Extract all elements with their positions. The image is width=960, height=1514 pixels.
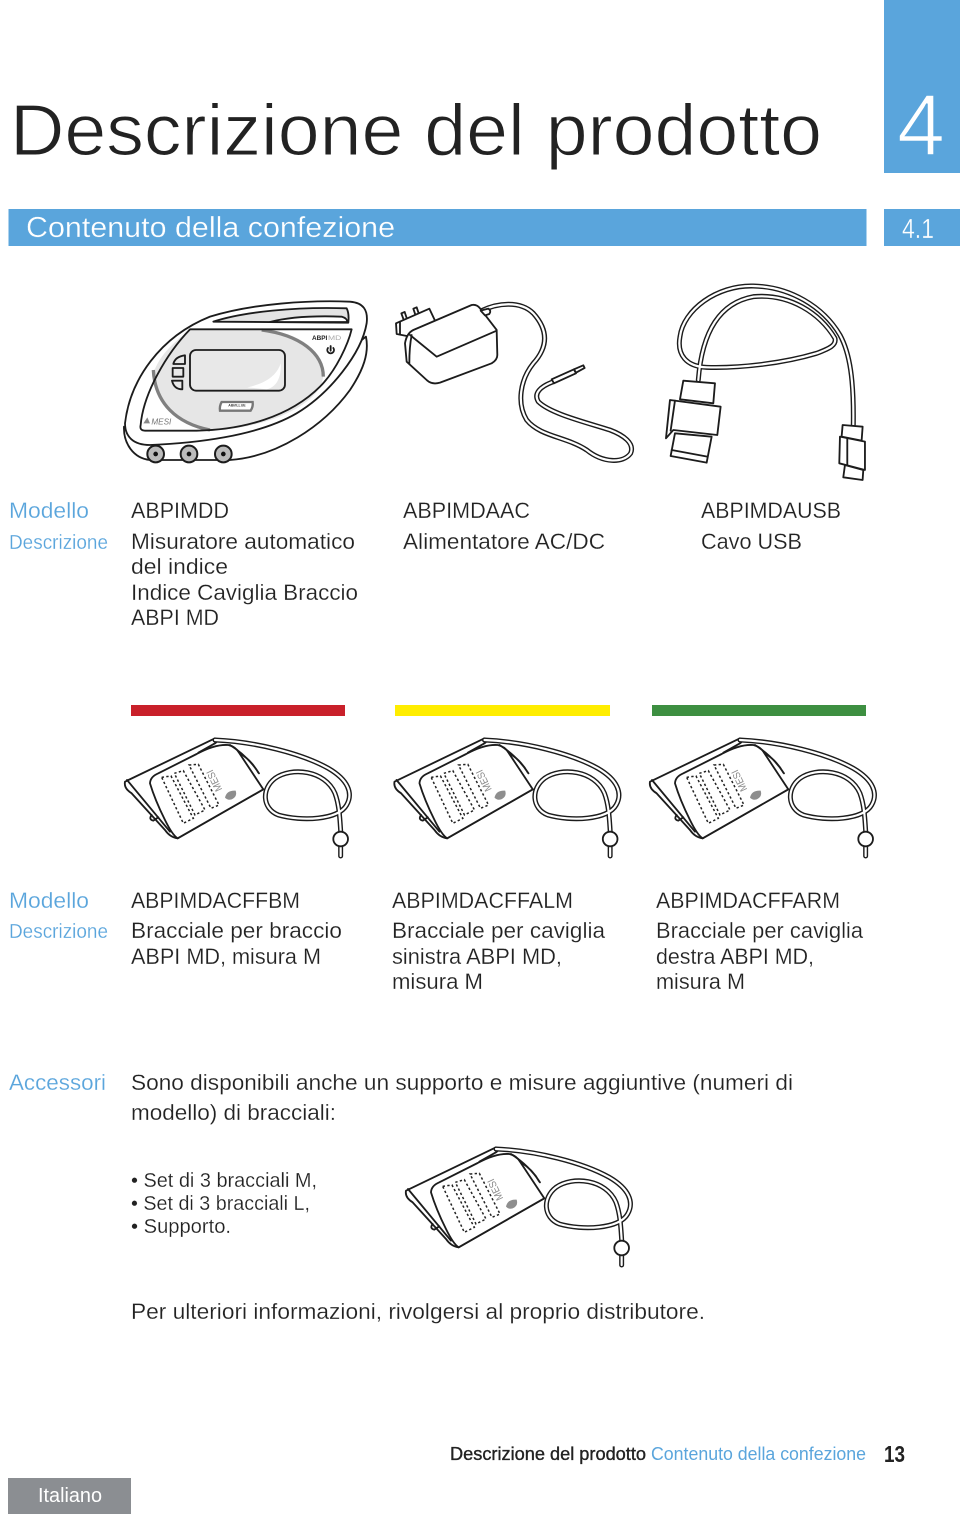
product: ABPIMDAAC: ABPIMDAAC <box>403 498 530 523</box>
chapter number tab <box>884 0 960 174</box>
product: ABPIMDACFFBM: Bracciale per braccio <box>131 918 342 943</box>
product: ABPIMDACFFALM: sinistra ABPI MD, <box>392 944 562 969</box>
illustration: right ankle cuff <box>650 738 874 856</box>
footer breadcrumb: Descrizione del prodotto <box>450 1444 646 1464</box>
product: ABPIMDACFFBM: ABPI MD, misura M <box>131 944 321 969</box>
language tab: Italiano <box>38 1485 102 1507</box>
accessories text: modello) di bracciali: <box>131 1100 336 1125</box>
language tab <box>8 1478 131 1514</box>
row 1 labels: Descrizione <box>9 532 108 554</box>
product: ABPIMDD <box>131 498 358 630</box>
closing note: Per ulteriori informazioni, rivolgersi al proprio distributore. <box>131 1299 705 1324</box>
product: ABPIMDACFFALM: misura M <box>392 969 483 994</box>
product: ABPIMDACFFARM: ABPIMDACFFARM <box>656 888 840 913</box>
colour bar: green <box>652 705 866 716</box>
accessories list: • Supporto. <box>131 1216 231 1238</box>
illustration: ABPI MD device <box>124 301 367 462</box>
accessories text <box>131 1070 793 1125</box>
accessories list: • Set di 3 bracciali L, <box>131 1193 310 1215</box>
page number: 13 <box>884 1441 905 1467</box>
accessories label: Accessori <box>9 1070 106 1095</box>
colour bar: red <box>131 705 345 716</box>
row 2 labels: Modello <box>9 888 89 913</box>
product: ABPIMDACFFARM: Bracciale per caviglia <box>656 918 864 943</box>
product: ABPIMDACFFALM: ABPIMDACFFALM <box>392 888 573 913</box>
product: ABPIMDAUSB <box>701 498 841 554</box>
product: ABPIMDACFFARM: destra ABPI MD, <box>656 944 814 969</box>
illustration: AC/DC adapter <box>396 304 632 460</box>
accessories list <box>131 1170 317 1238</box>
product: ABPIMDD: del indice <box>131 554 228 579</box>
row 2 labels <box>9 888 108 943</box>
illustration: right ankle cuff: MESI <box>730 768 750 793</box>
product: ABPIMDD: ABPI MD <box>131 605 219 630</box>
section heading bar <box>8 209 866 246</box>
product: ABPIMDACFFALM <box>392 888 606 994</box>
product: ABPIMDD: Misuratore automatico <box>131 529 355 554</box>
illustration: ABPI MD device: ABI/ILLUE <box>228 403 246 407</box>
footer breadcrumb: Contenuto della confezione <box>651 1444 866 1464</box>
product: ABPIMDD: ABPIMDD <box>131 498 229 523</box>
row 1 labels <box>9 498 108 554</box>
footer breadcrumb <box>450 1444 866 1464</box>
illustration: accessory cuff <box>406 1147 630 1265</box>
row 2 labels: Descrizione <box>9 921 108 943</box>
product: ABPIMDD: Indice Caviglia Braccio <box>131 580 358 605</box>
product: ABPIMDAUSB: ABPIMDAUSB <box>701 498 841 523</box>
row 1 labels: Modello <box>9 498 89 523</box>
illustration: left ankle cuff: MESI <box>475 768 495 793</box>
title: Descrizione del prodotto <box>10 91 822 171</box>
product: ABPIMDACFFARM: misura M <box>656 969 745 994</box>
section heading bar: Contenuto della confezione <box>26 212 395 244</box>
section number bar: 4.1 <box>902 213 934 244</box>
illustration: left ankle cuff <box>394 738 619 856</box>
product: ABPIMDAAC <box>403 498 605 554</box>
illustration: ABPI MD device: MESI <box>151 417 172 426</box>
product: ABPIMDACFFALM: Bracciale per caviglia <box>392 918 606 943</box>
chapter number tab: 4 <box>897 77 945 174</box>
illustration: accessory cuff: MESI <box>486 1177 506 1202</box>
product: ABPIMDAAC: Alimentatore AC/DC <box>403 529 605 554</box>
illustration: USB cable <box>666 286 865 480</box>
product: ABPIMDAUSB: Cavo USB <box>701 529 802 554</box>
illustration: arm cuff <box>125 738 349 856</box>
product: ABPIMDACFFARM <box>656 888 864 994</box>
illustration: ABPI MD device: MD <box>328 335 342 342</box>
section number bar <box>884 209 960 246</box>
accessories list: • Set di 3 bracciali M, <box>131 1170 317 1192</box>
illustration: ABPI MD device: ABPI <box>312 335 328 342</box>
colour bar: yellow <box>395 705 610 716</box>
product: ABPIMDACFFBM <box>131 888 342 969</box>
product: ABPIMDACFFBM: ABPIMDACFFBM <box>131 888 300 913</box>
accessories text: Sono disponibili anche un supporto e misure aggiuntive (numeri di <box>131 1070 793 1095</box>
illustration: arm cuff: MESI <box>205 768 225 793</box>
